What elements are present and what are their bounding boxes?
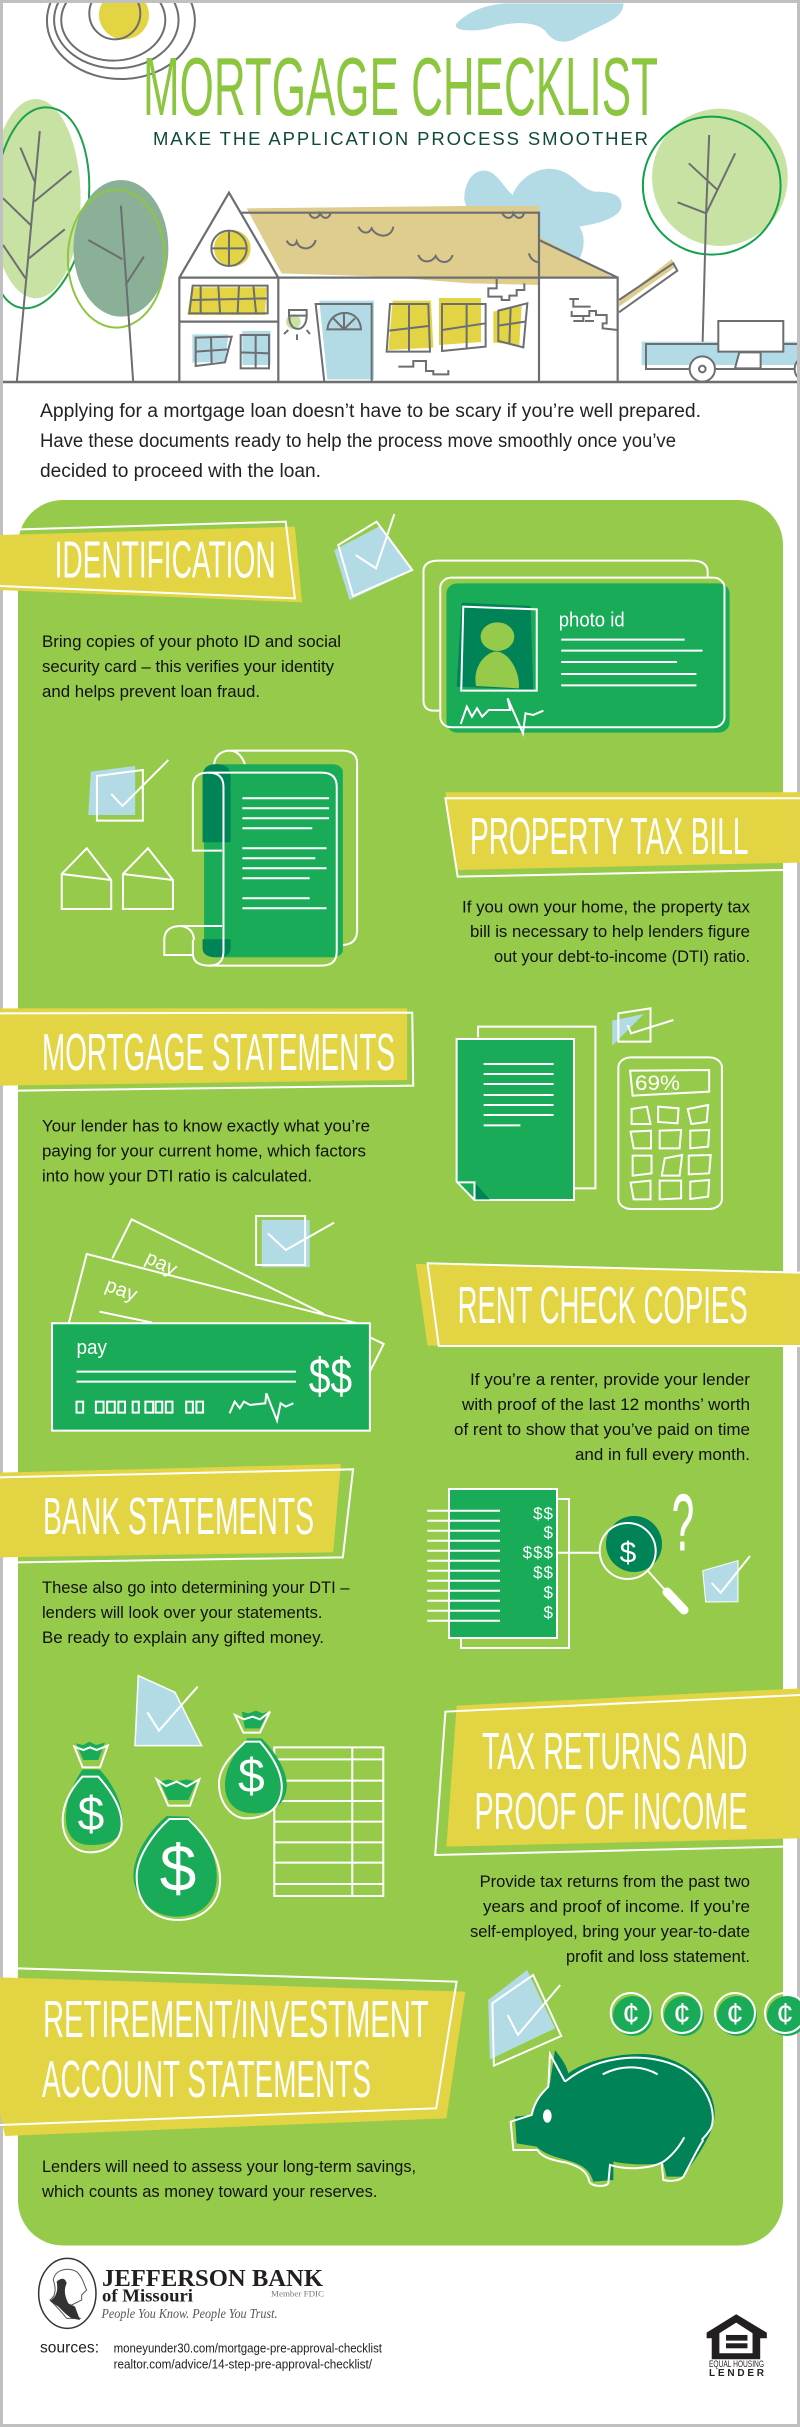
body: bank statements: These also go into determining your DTI – xyxy=(42,1578,350,1597)
yellow window xyxy=(387,301,433,352)
section: tax returns and proof of income xyxy=(63,1676,800,1966)
body: bank statements: Be ready to explain any gifted money. xyxy=(42,1628,324,1647)
body: property tax bill xyxy=(462,898,750,966)
body: mortgage statements: Your lender has to know exactly what you’re xyxy=(42,1117,370,1136)
icon: house left part and roof xyxy=(179,193,539,382)
subtitle: MAKE THE APPLICATION PROCESS SMOOTHER xyxy=(153,128,648,149)
section: rent check copies xyxy=(52,1216,800,1464)
steps crack xyxy=(398,361,448,374)
fallen beam xyxy=(619,259,676,307)
body: retirement xyxy=(41,2157,416,2201)
sky and trees xyxy=(0,0,788,382)
logo text: Member FDIC: Member FDIC xyxy=(271,2290,324,2299)
banner: tax returns xyxy=(435,1688,800,1855)
body: property tax bill: out your debt-to-income (DTI) ratio. xyxy=(494,947,750,966)
label: lender: LENDER xyxy=(709,2368,765,2379)
sources: realtor.com/advice/14-step-pre-approval-checklist/ xyxy=(114,2358,372,2372)
attic window xyxy=(187,286,268,315)
body: rent check copies: with proof of the last 12 months’ worth xyxy=(461,1395,750,1414)
wall cracks xyxy=(488,279,524,300)
icon: checkbox xyxy=(135,1676,202,1746)
front door xyxy=(316,301,374,382)
sources: sources: xyxy=(40,2340,99,2357)
heading: retirement/investment account statements xyxy=(42,1991,429,2109)
intro text: Applying for a mortgage loan doesn’t have to be scary if you’re well prepared. xyxy=(40,401,701,422)
lower left windows xyxy=(192,331,271,368)
icon: money bag left xyxy=(63,1742,123,1852)
icon: magnifying glass xyxy=(600,1516,684,1610)
icon: money bag top: $ xyxy=(238,1750,265,1803)
label: dollars: $$ xyxy=(309,1348,352,1404)
side window xyxy=(493,303,527,347)
body: identification xyxy=(42,632,341,701)
icon: piggy bank xyxy=(511,2050,715,2186)
body: mortgage statements: into how your DTI ratio is calculated. xyxy=(42,1167,312,1186)
banner: rent check copies xyxy=(416,1263,800,1346)
icon: back cloud xyxy=(464,169,621,263)
header illustration: sun, clouds, trees, house, truck xyxy=(0,0,800,382)
icon: checkbox xyxy=(488,1970,561,2066)
icon: coins: ¢ xyxy=(726,1996,744,2031)
body: tax returns: profit and loss statement. xyxy=(566,1947,750,1966)
icon: coins: ¢ xyxy=(673,1996,691,2031)
icon: money bag large: $ xyxy=(160,1831,196,1905)
section: bank statements xyxy=(0,1464,750,1648)
icon: house right part and truck xyxy=(470,206,800,382)
icon: checkbox xyxy=(703,1556,750,1602)
porch lamp xyxy=(284,310,310,340)
illustration: statement document xyxy=(457,1008,673,1200)
label: photo id: photo id xyxy=(559,610,625,632)
icon: money bag large xyxy=(133,1779,220,1920)
icon: coins: ¢ xyxy=(776,1996,794,2031)
body: tax returns xyxy=(470,1872,750,1966)
icon: calculator xyxy=(618,1057,722,1209)
illustration: bank statement document: $ xyxy=(544,1583,554,1602)
banner: identification xyxy=(0,522,302,602)
label: pay front check: pay xyxy=(76,1337,107,1359)
section: property tax bill xyxy=(62,751,800,966)
body: mortgage statements: paying for your current home, which factors xyxy=(42,1142,366,1161)
illustration: checks xyxy=(52,1216,384,1431)
center yellow window xyxy=(439,298,486,351)
banner: retirement xyxy=(0,1968,465,2136)
heading: bank statements: BANK STATEMENTS xyxy=(43,1488,314,1546)
icon: money bag left: $ xyxy=(78,1788,104,1841)
section: bank statements: ? xyxy=(672,1478,694,1567)
banner: property tax bill xyxy=(445,792,800,877)
body: retirement: Lenders will need to assess your long-term savings, xyxy=(42,2157,416,2176)
intro text: Have these documents ready to help the process move smoothly once you’ve xyxy=(40,431,676,452)
body: rent check copies: If you’re a renter, provide your lender xyxy=(470,1370,750,1389)
label: pay middle check: pay xyxy=(102,1274,140,1306)
body: bank statements: lenders will look over your statements. xyxy=(42,1603,322,1622)
icon: sun with rings xyxy=(47,0,195,79)
heading: retirement/investment account statements: ACCOUNT STATEMENTS xyxy=(42,2051,371,2109)
body: property tax bill: bill is necessary to help lenders figure xyxy=(470,922,750,941)
body: rent check copies xyxy=(454,1370,750,1464)
icon: checkbox xyxy=(334,514,412,600)
body: rent check copies: and in full every month. xyxy=(575,1445,750,1464)
body: bank statements xyxy=(42,1578,350,1647)
roof scallops xyxy=(287,213,539,262)
logo tagline: People You Know. People You Trust. xyxy=(101,2307,278,2322)
heading: identification: IDENTIFICATION xyxy=(55,532,276,590)
heading: tax returns and proof of income xyxy=(474,1723,748,1841)
illustration: bank statement document: $ xyxy=(544,1523,554,1542)
illustration: bank statement document: $$ xyxy=(533,1504,554,1523)
icon: coins: ¢ xyxy=(622,1996,640,2031)
label: 69%: 69% xyxy=(635,1072,680,1095)
body: tax returns: Provide tax returns from the past two xyxy=(480,1872,750,1891)
icon: jefferson portrait medallion xyxy=(39,2258,96,2328)
banner: bank statements xyxy=(0,1464,353,1562)
round window xyxy=(211,230,251,267)
body: identification: and helps prevent loan fraud. xyxy=(42,682,260,701)
icon: right tree xyxy=(643,109,788,345)
body: retirement: which counts as money toward your reserves. xyxy=(41,2182,377,2201)
icon: money bag top xyxy=(219,1711,287,1818)
icon: coins xyxy=(611,1993,800,2036)
illustration: tax bill scroll, houses and checkbox xyxy=(62,751,357,966)
heading: mortgage statements: MORTGAGE STATEMENTS xyxy=(42,1024,395,1082)
heading: retirement/investment account statements: RETIREMENT/INVESTMENT xyxy=(43,1991,429,2049)
illustration: bank statement document: $$$ xyxy=(523,1543,554,1562)
footer: bank logo xyxy=(39,2258,324,2328)
section: identification xyxy=(0,514,730,733)
icon: equal housing house xyxy=(707,2314,767,2359)
icon: second tree xyxy=(68,180,168,382)
body: identification: security card – this verifies your identity xyxy=(42,657,334,676)
equal housing lender logo xyxy=(707,2314,767,2379)
body: mortgage statements xyxy=(42,1117,370,1186)
section: mortgage statements xyxy=(0,1008,722,1209)
label: pay back check: pay xyxy=(142,1247,180,1281)
section: retirement and investment account statements xyxy=(0,1968,800,2201)
icon: photo id card xyxy=(423,561,730,733)
body: identification: Bring copies of your photo ID and social xyxy=(42,632,341,651)
illustration: bank statement document: $ xyxy=(544,1603,554,1622)
icon: left tree xyxy=(0,99,89,382)
logo text: Jefferson Bank: JEFFERSON BANK xyxy=(102,2266,323,2292)
body: tax returns: self-employed, bring your year-to-date xyxy=(470,1922,750,1941)
illustration: bank statement document xyxy=(427,1489,600,1648)
body: property tax bill: If you own your home, the property tax xyxy=(462,898,750,917)
illustration: bank statement document: $$ xyxy=(533,1563,554,1582)
illustration: tax table xyxy=(274,1747,383,1896)
logo text: of Missouri: of Missouri xyxy=(102,2286,193,2306)
intro text: decided to proceed with the loan. xyxy=(40,461,321,482)
intro text xyxy=(40,401,701,482)
body: rent check copies: of rent to show that you’ve paid on time xyxy=(454,1420,750,1439)
label: equal housing: EQUAL HOUSING xyxy=(709,2359,764,2369)
body: tax returns: years and proof of income. If you’re xyxy=(483,1897,750,1916)
icon: magnifying glass: $ xyxy=(620,1537,637,1570)
icon: top cloud xyxy=(456,3,623,42)
truck xyxy=(642,321,800,382)
sources xyxy=(40,2340,382,2372)
sources: moneyunder30.com/mortgage-pre-approval-checklist xyxy=(114,2342,382,2356)
banner: mortgage statements xyxy=(0,1008,413,1091)
panel: green checklist background xyxy=(18,500,783,2246)
